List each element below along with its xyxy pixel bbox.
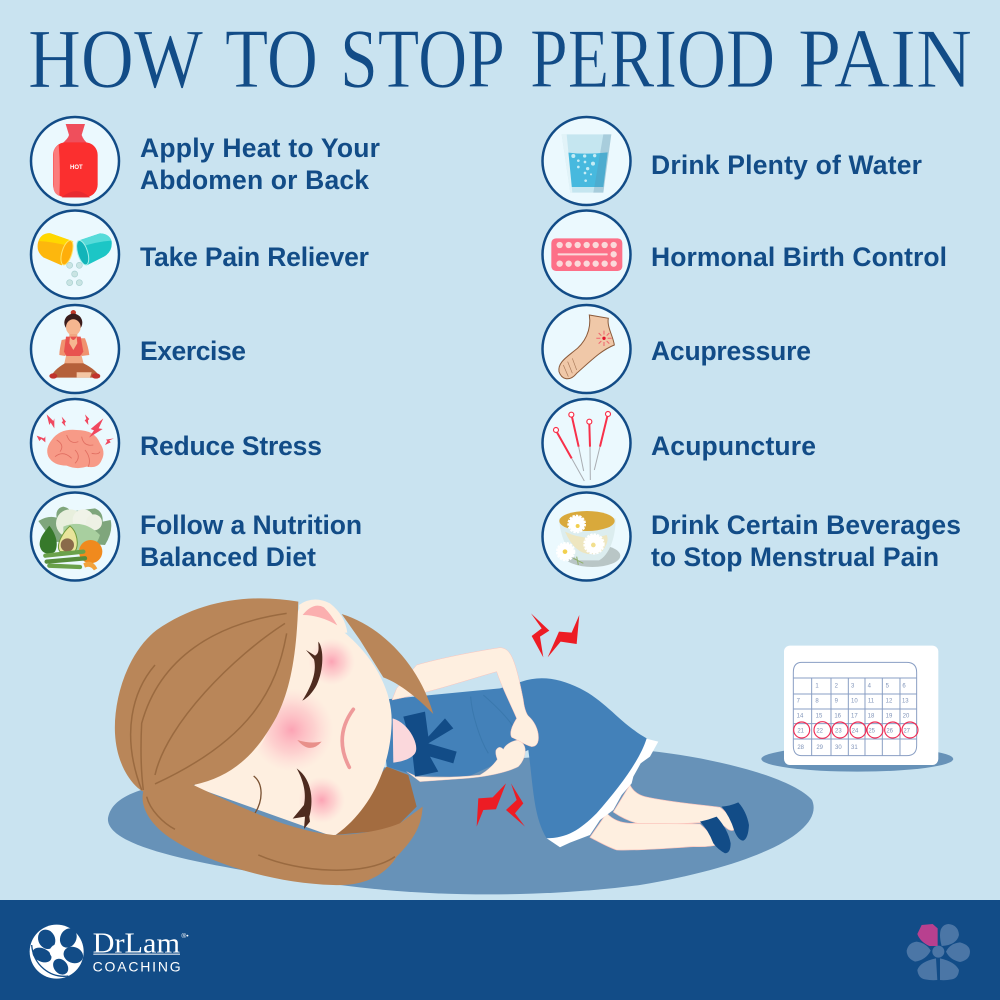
face: [193, 607, 392, 837]
circle: nutrition: [31, 492, 119, 580]
calendar page: 20: [903, 713, 910, 719]
calendar page: 25: [868, 729, 876, 735]
icon: foot: [559, 315, 614, 379]
upper side hair: [342, 614, 433, 714]
cheeks: [250, 638, 355, 823]
calendar page: 4: [868, 684, 872, 690]
icon: glass of water: [562, 134, 611, 193]
title: PAIN: [798, 12, 972, 106]
body of girl: [380, 613, 749, 853]
calendar page: 19: [886, 713, 893, 719]
heading: beverages: Drink Certain Beverages: [651, 510, 961, 540]
icon: hot water bottle: HOT: [70, 165, 83, 171]
calendar page: 2: [835, 684, 839, 690]
logo wordmark: ®•: [181, 932, 189, 940]
girl head: [115, 598, 433, 885]
circle: beverages: [542, 492, 630, 580]
pain bolts: [477, 613, 579, 827]
calendar page: 7: [797, 698, 801, 704]
heading: acupuncture: Acupuncture: [651, 431, 816, 461]
icon: pill pack: [551, 238, 622, 271]
calendar page: 24: [852, 729, 859, 735]
calendar page: 9: [835, 698, 839, 704]
bow: [403, 712, 457, 777]
heading: nutrition: Balanced Diet: [140, 542, 316, 572]
heading: pain reliever: Take Pain Reliever: [140, 242, 369, 272]
heading: acupressure: Acupressure: [651, 336, 811, 366]
calendar page: 27: [903, 729, 911, 735]
heading: beverages: [651, 510, 961, 572]
logo wordmark: [93, 928, 189, 975]
calendar page: 17: [851, 713, 858, 719]
calendar page: 3: [851, 684, 855, 690]
footer band: [0, 900, 1000, 1000]
calendar page: 16: [834, 713, 842, 719]
logo wordmark: COACHING: [93, 959, 181, 975]
calendar page: 5: [886, 684, 890, 690]
calendar page: 28: [797, 745, 805, 751]
heading: apply heat: Abdomen or Back: [140, 165, 369, 195]
legs: [590, 785, 735, 850]
calendar page: [784, 646, 938, 765]
circle: pain reliever: [31, 210, 119, 298]
icon: brain: [37, 414, 114, 468]
title: TO: [225, 12, 318, 106]
heading: apply heat: Apply Heat to Your: [140, 133, 380, 163]
slip: [547, 738, 658, 847]
calendar page: 26: [886, 729, 894, 735]
title: STOP: [340, 12, 505, 106]
circle: hot water bottle: [31, 117, 119, 205]
heading: beverages: to Stop Menstrual Pain: [651, 542, 939, 572]
back hair: [333, 767, 417, 835]
hair highlight: [208, 733, 267, 782]
calendar page: 18: [868, 713, 875, 719]
calendar page: 21: [797, 729, 805, 735]
shoes: [700, 802, 749, 853]
heading: nutrition: [140, 510, 362, 572]
calendar page: 10: [851, 698, 858, 704]
title: HOW: [28, 12, 204, 106]
lower arm: [407, 740, 525, 782]
eyebrow: [254, 776, 261, 813]
dress creases: [471, 695, 513, 753]
circle: acupressure: [542, 305, 630, 393]
title: [28, 12, 972, 106]
calendar page: 30: [835, 745, 842, 751]
icon: needles: [553, 411, 610, 481]
logo: DrLam Coaching: [30, 925, 189, 979]
calendar page: 14: [797, 713, 804, 719]
heading: exercise: Exercise: [140, 336, 246, 366]
heading: reduce stress: Reduce Stress: [140, 431, 322, 461]
icon: flower watermark: [907, 924, 970, 980]
logo wordmark: DrLam: [93, 928, 180, 960]
icon: vegetables: [38, 507, 111, 570]
circle: reduce stress: [31, 399, 119, 487]
mouth: [342, 709, 353, 767]
calendar page: 12: [886, 698, 893, 704]
icon: yoga woman: [49, 310, 100, 379]
hair strands: [131, 613, 395, 870]
calendar page: 13: [902, 698, 909, 704]
heading: water: Drink Plenty of Water: [651, 150, 922, 180]
nose: [297, 740, 322, 748]
heading: nutrition: Follow a Nutrition: [140, 510, 362, 540]
eyes: [293, 642, 322, 829]
calendar page: 1: [815, 684, 819, 690]
icon: chamomile tea: [557, 511, 620, 567]
calendar page: 6: [902, 684, 906, 690]
dress: [380, 678, 647, 838]
calendar page: 15: [816, 713, 823, 719]
front hair: [115, 598, 423, 885]
calendar page: 31: [851, 745, 858, 751]
logo mark: [30, 925, 85, 979]
neck: [393, 718, 416, 763]
calendar page: 29: [816, 745, 824, 751]
calendar page: 23: [835, 729, 842, 735]
title: PERIOD: [530, 12, 775, 106]
circle: water: [542, 117, 630, 205]
circle: birth control: [542, 210, 630, 298]
upper arm: [392, 648, 538, 747]
circle: exercise: [31, 305, 119, 393]
ear: [299, 600, 347, 633]
calendar shadow: [761, 746, 953, 772]
calendar page: 11: [868, 698, 875, 704]
calendar: [761, 646, 953, 772]
icon: capsules: [38, 233, 112, 286]
calendar page: 8: [815, 698, 819, 704]
heading: apply heat: [140, 133, 380, 195]
floor shadow: [108, 750, 814, 894]
calendar page: 22: [816, 729, 824, 735]
circle: acupuncture: [542, 399, 630, 487]
heading: birth control: Hormonal Birth Control: [651, 242, 947, 272]
